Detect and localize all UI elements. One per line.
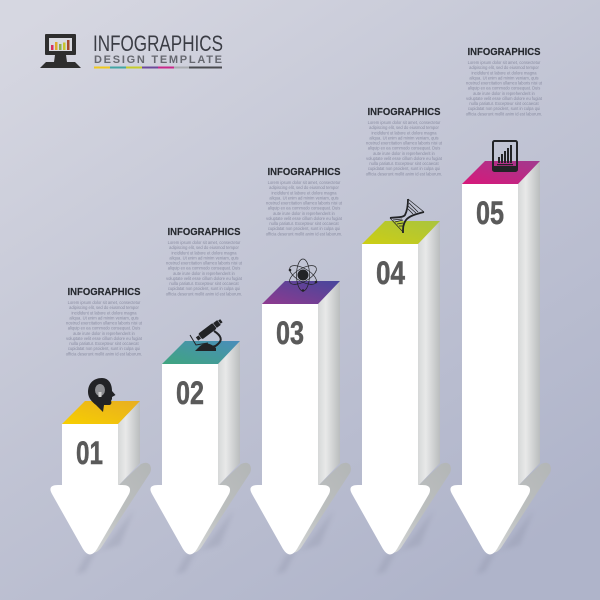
text block 3: Lorem ipsum dolor sit amet, consectetur (268, 180, 341, 185)
column 3 arrow (250, 281, 351, 574)
text block 2: aliqua. Ut enim ad minim veniam, quis (169, 255, 239, 260)
text block 2: officia deserunt mollit anim id est laborum. (166, 291, 242, 296)
text block 4: cupidatat non proident, sunt in culpa qui (368, 166, 440, 171)
column 1 arrow: 01 (76, 435, 103, 471)
text block 1: voluptate velit esse cillum dolore eu fugiat (66, 336, 143, 341)
text block 1: adipiscing elit, sed do eiusmod tempor (69, 305, 139, 310)
text block 4: nulla pariatur. Excepteur sint occaecat (369, 161, 439, 166)
text block 3: nostrud exercitation ullamco laboris nisi ut (266, 200, 343, 206)
text block 3: aliqua. Ut enim ad minim veniam, quis (269, 195, 339, 200)
text block 2 (166, 227, 243, 296)
icon: atom (287, 259, 319, 292)
column 1 arrow (50, 401, 151, 574)
text block 5: Lorem ipsum dolor sit amet, consectetur (468, 60, 541, 65)
text block 3: incididunt ut labore et dolore magna (271, 190, 337, 195)
text block 5: nostrud exercitation ullamco laboris nisi ut (466, 80, 543, 86)
text block 5: INFOGRAPHICS (468, 47, 541, 58)
icon: tablet with chart (493, 141, 517, 172)
text block 5: aliqua. Ut enim ad minim veniam, quis (469, 75, 539, 80)
text block 4: Lorem ipsum dolor sit amet, consectetur (368, 120, 441, 125)
text block 3: INFOGRAPHICS (268, 167, 341, 178)
text block 2: nulla pariatur. Excepteur sint occaecat (169, 281, 239, 286)
text block 4: aliqua. Ut enim ad minim veniam, quis (369, 135, 439, 140)
icon: microscope (190, 318, 223, 351)
text block 3: aute irure dolor in reprehenderit in (273, 211, 336, 216)
column 5 arrow: 05 (476, 195, 504, 231)
text block 1: cupidatat non proident, sunt in culpa qui (68, 346, 140, 351)
text block 5: cupidatat non proident, sunt in culpa qui (468, 106, 540, 111)
text block 1: Lorem ipsum dolor sit amet, consectetur (68, 300, 141, 305)
column 5 arrow (450, 161, 551, 574)
subtitle: DESIGN TEMPLATE (94, 54, 222, 66)
text block 3: voluptate velit esse cillum dolore eu fugiat (266, 216, 343, 221)
text block 2: incididunt ut labore et dolore magna (171, 250, 237, 255)
text block 1: nostrud exercitation ullamco laboris nisi ut (66, 320, 143, 326)
text block 1: aliqua. Ut enim ad minim veniam, quis (69, 315, 139, 320)
text block 2: cupidatat non proident, sunt in culpa qui (168, 286, 240, 291)
text block 5: aliquip ex ea commodo consequat. Duis (468, 86, 540, 91)
text block 1: aliquip ex ea commodo consequat. Duis (68, 326, 140, 331)
column 4 arrow (350, 221, 451, 574)
text block 2: Lorem ipsum dolor sit amet, consectetur (168, 240, 241, 245)
text block 1: officia deserunt mollit anim id est laborum. (66, 351, 142, 356)
text block 2: aliquip ex ea commodo consequat. Duis (168, 266, 240, 271)
column 2 arrow (150, 341, 251, 574)
text block 2: INFOGRAPHICS (168, 227, 241, 238)
text block 5: voluptate velit esse cillum dolore eu fugiat (466, 96, 543, 101)
text block 1: incididunt ut labore et dolore magna (71, 310, 137, 315)
title: INFOGRAPHICS (93, 31, 223, 56)
column 4 arrow: 04 (376, 255, 405, 291)
column 2 arrow: 02 (176, 375, 204, 411)
text block 3: nulla pariatur. Excepteur sint occaecat (269, 221, 339, 226)
text block 4: aute irure dolor in reprehenderit in (373, 151, 436, 156)
text block 5: officia deserunt mollit anim id est laborum. (466, 111, 542, 116)
text block 5: nulla pariatur. Excepteur sint occaecat (469, 101, 539, 106)
text block 4: INFOGRAPHICS (368, 107, 441, 118)
logo: monitor icon (40, 34, 81, 68)
text block 3: cupidatat non proident, sunt in culpa qui (268, 226, 340, 231)
text block 2: adipiscing elit, sed do eiusmod tempor (169, 245, 239, 250)
text block 5: aute irure dolor in reprehenderit in (473, 91, 536, 96)
colour strip (94, 66, 222, 68)
text block 1: nulla pariatur. Excepteur sint occaecat (69, 341, 139, 346)
text block 3 (266, 167, 343, 236)
text block 4: nostrud exercitation ullamco laboris nisi ut (366, 140, 443, 146)
icon: DNA helix (390, 199, 424, 233)
text block 1: aute irure dolor in reprehenderit in (73, 331, 136, 336)
text block 4: incididunt ut labore et dolore magna (371, 130, 437, 135)
text block 5: adipiscing elit, sed do eiusmod tempor (469, 65, 539, 70)
text block 4: adipiscing elit, sed do eiusmod tempor (369, 125, 439, 130)
text block 1 (66, 287, 143, 356)
text block 3: officia deserunt mollit anim id est laborum. (266, 231, 342, 236)
text block 4: voluptate velit esse cillum dolore eu fugiat (366, 156, 443, 161)
text block 3: adipiscing elit, sed do eiusmod tempor (269, 185, 339, 190)
icon: head with light bulb (88, 378, 116, 412)
text block 2: aute irure dolor in reprehenderit in (173, 271, 236, 276)
text block 4 (366, 107, 443, 176)
text block 1: INFOGRAPHICS (68, 287, 141, 298)
text block 4: aliquip ex ea commodo consequat. Duis (368, 146, 440, 151)
text block 5: incididunt ut labore et dolore magna (471, 70, 537, 75)
text block 2: nostrud exercitation ullamco laboris nisi ut (166, 260, 243, 266)
text block 4: officia deserunt mollit anim id est laborum. (366, 171, 442, 176)
text block 3: aliquip ex ea commodo consequat. Duis (268, 206, 340, 211)
text block 2: voluptate velit esse cillum dolore eu fugiat (166, 276, 243, 281)
text block 5 (466, 47, 543, 116)
column 3 arrow: 03 (276, 315, 304, 351)
